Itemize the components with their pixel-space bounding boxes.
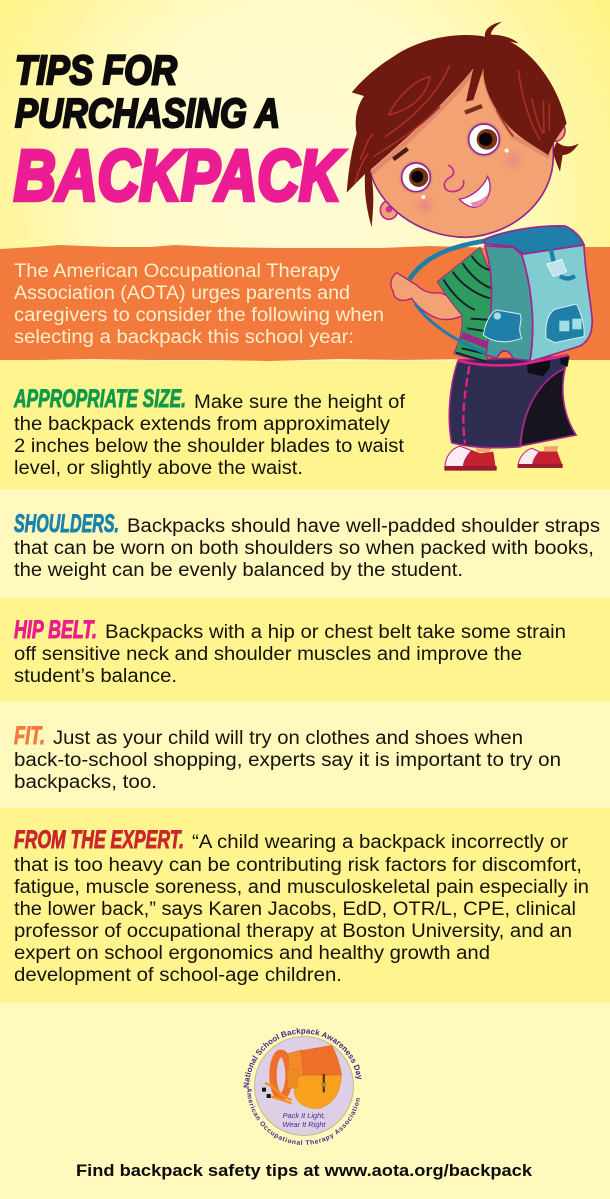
text: expert quote: that is too heavy can be contributing risk factors for discomfort, — [14, 854, 582, 876]
title — [14, 47, 345, 216]
backpack — [458, 226, 592, 365]
text: expert quote: expert on school ergonomics and healthy growth and — [14, 942, 490, 964]
badge slogan: Wear It Right — [282, 1120, 326, 1129]
boy body and backpack — [391, 226, 592, 471]
title line: tips for: TIPS FOR — [15, 47, 177, 93]
text: hip belt: student’s balance. — [14, 665, 177, 687]
panel: hip belt — [0, 598, 610, 702]
cheeks — [410, 145, 529, 221]
text: fit — [14, 727, 561, 793]
shirt — [437, 247, 495, 362]
badge ring text: bottom: American Occupational Therapy Association — [247, 1088, 360, 1145]
text: hip belt — [14, 621, 566, 687]
text: fit: Just as your child will try on clothes and shoes when — [53, 727, 523, 749]
text: intro: selecting a backpack this school year: — [14, 326, 354, 348]
text: expert quote: “A child wearing a backpack incorrectly or — [192, 831, 568, 853]
hair tail — [553, 142, 579, 172]
left ear — [380, 201, 398, 219]
panel: intro orange band — [0, 245, 610, 361]
panel: from the expert — [0, 808, 610, 1003]
hip strap and straps — [409, 241, 487, 354]
text: shoulders: Backpacks should have well-padded shoulder straps — [127, 515, 600, 537]
panel: header background — [0, 0, 610, 361]
text: intro: Association (AOTA) urges parents and — [14, 282, 350, 304]
face — [370, 42, 553, 237]
text: hip belt: Backpacks with a hip or chest belt take some strain — [105, 621, 566, 643]
heading: shoulders: SHOULDERS. — [14, 510, 119, 538]
text: intro — [14, 260, 384, 348]
shoes — [444, 446, 563, 471]
text: expert quote — [14, 831, 589, 986]
illustration: boy with backpack — [347, 22, 592, 471]
text: appropriate size: 2 inches below the shoulder blades to waist — [14, 435, 405, 457]
panel: fit — [0, 702, 610, 808]
text: appropriate size — [14, 391, 406, 479]
text: appropriate size: the backpack extends from approximately — [14, 413, 390, 435]
left eye — [399, 161, 433, 194]
boy head — [347, 22, 579, 237]
heading: hip belt: HIP BELT. — [14, 616, 97, 644]
right ear — [545, 120, 565, 141]
text: expert quote: professor of occupational therapy at Boston University, and an — [14, 920, 572, 942]
badge: national school backpack awareness day — [243, 1028, 362, 1145]
footer call to action: Find backpack safety tips at www.aota.org/backpack — [76, 1161, 533, 1180]
badge ring text: top: National School Backpack Awareness Day — [243, 1028, 362, 1088]
text: fit: backpacks, too. — [14, 771, 157, 793]
text: intro: caregivers to consider the following when — [14, 304, 384, 326]
badge slogan — [282, 1111, 326, 1129]
badge slogan: Pack It Light, — [283, 1111, 325, 1120]
eye sparkles — [421, 149, 509, 199]
hair highlights — [355, 65, 549, 183]
panel: shoulders — [0, 489, 610, 598]
hair shadow on forehead — [372, 72, 549, 173]
heading: fit: FIT. — [14, 722, 45, 750]
text: shoulders: that can be worn on both shoulders so when packed with books, — [14, 537, 594, 559]
eyebrows — [393, 106, 482, 159]
right eye — [466, 121, 502, 157]
text: appropriate size: level, or slightly above the waist. — [14, 457, 303, 479]
text: hip belt: off sensitive neck and shoulder muscles and improve the — [14, 643, 522, 665]
title line: purchasing a: PURCHASING A — [15, 90, 280, 136]
arm — [391, 273, 475, 320]
nose — [444, 165, 464, 192]
heading: appropriate size: APPROPRIATE SIZE. — [13, 385, 186, 413]
title line: backpack: BACKPACK — [14, 137, 345, 216]
hair — [347, 22, 567, 227]
text: shoulders — [14, 515, 600, 581]
text: appropriate size: Make sure the height of — [194, 391, 406, 413]
mouth — [459, 177, 490, 207]
text: shoulders: the weight can be evenly balanced by the student. — [14, 559, 463, 581]
panel: footer — [76, 1028, 533, 1180]
text: expert quote: the lower back,” says Karen Jacobs, EdD, OTR/L, CPE, clinical — [14, 898, 576, 920]
text: fit: back-to-school shopping, experts say it is important to try on — [14, 749, 561, 771]
badge icon: orange backpack — [262, 1045, 342, 1109]
text: expert quote: development of school-age children. — [14, 964, 342, 986]
trousers — [449, 356, 576, 448]
heading: from the expert: FROM THE EXPERT. — [14, 826, 184, 854]
text: intro: The American Occupational Therapy — [14, 260, 340, 282]
panel: appropriate size — [0, 361, 610, 489]
text: expert quote: fatigue, muscle soreness, and musculoskeletal pain especially in — [14, 876, 589, 898]
